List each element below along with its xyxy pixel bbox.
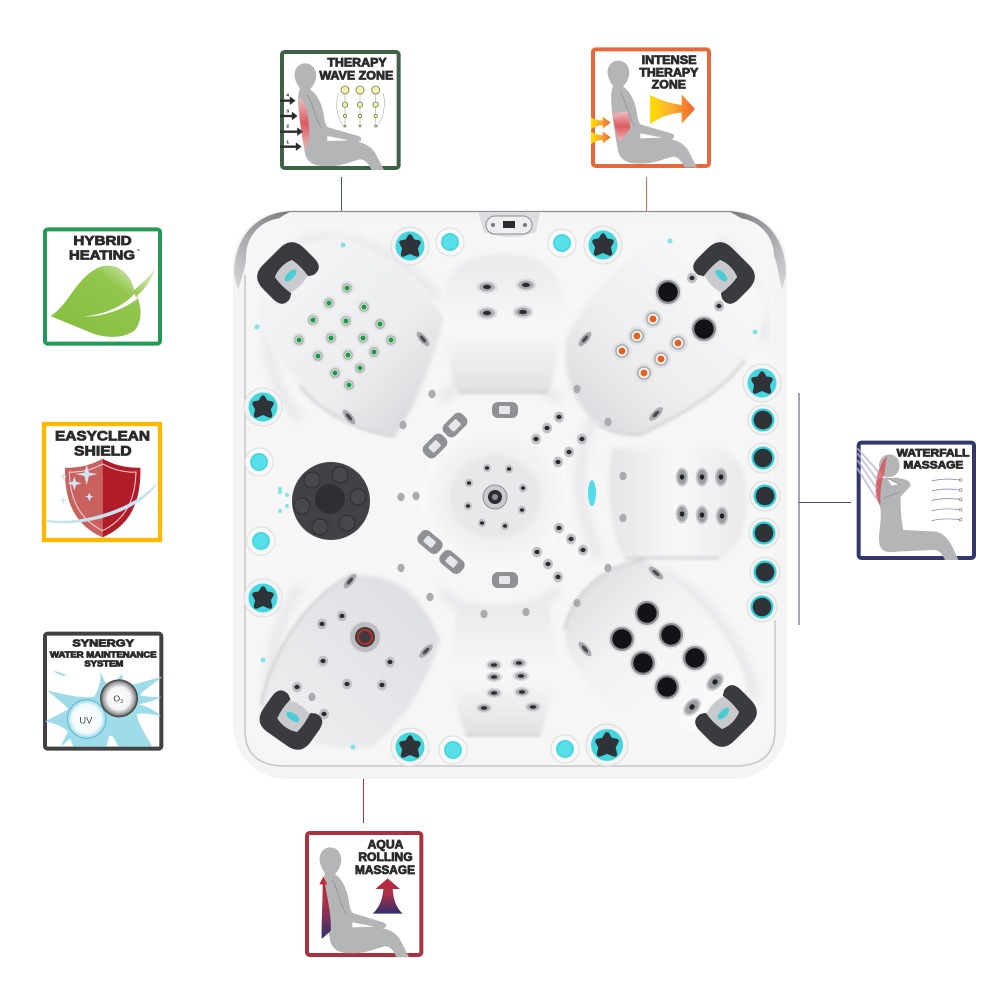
side seats (445, 254, 746, 735)
hot tub top view (233, 211, 787, 779)
shield icon (47, 459, 157, 537)
star control valves (244, 226, 781, 766)
panel: synergy water maintenance system (45, 634, 162, 749)
back gradient arrow (319, 877, 331, 939)
heading (319, 56, 393, 82)
filter disc (292, 462, 370, 540)
ridge shadows (262, 360, 745, 735)
heading: SYNERGY (72, 639, 134, 650)
heavy foot well jets (415, 402, 518, 588)
figure (875, 454, 958, 560)
arrow numbers: 4 (286, 93, 289, 98)
cyan accent lights (254, 238, 758, 750)
heading (639, 53, 698, 92)
central foot well (421, 423, 569, 571)
heading: WAVE ZONE (319, 68, 393, 82)
uv bubble: UV (79, 716, 93, 726)
heading: THERAPY (639, 65, 698, 79)
up arrow (373, 878, 403, 914)
small corner jets (292, 273, 727, 719)
arrow numbers (286, 93, 289, 144)
callout line: aqua rolling massage (362, 660, 364, 823)
panel: waterfall massage (857, 443, 974, 560)
heading: ZONE (652, 78, 686, 92)
callout line: intense therapy zone (646, 177, 648, 318)
heading (897, 447, 970, 472)
heading: MASSAGE (355, 864, 415, 877)
ripple lines (932, 479, 962, 521)
heading: ROLLING (358, 851, 413, 864)
central drain and ring jets (464, 464, 527, 530)
bottom seat jets (476, 658, 541, 713)
inner rim line (245, 275, 775, 766)
wedge jets (340, 330, 665, 660)
corner lounge basins (258, 236, 767, 748)
orange arrow (650, 94, 695, 124)
green therapy wave jets (292, 281, 398, 392)
panel: aqua rolling massage (307, 833, 421, 957)
panel: intense therapy zone (591, 49, 709, 167)
heading: THERAPY (327, 56, 387, 70)
heading: INTENSE (642, 53, 697, 67)
heading: ™ (137, 249, 140, 253)
splash icon (45, 670, 162, 747)
heading: WATER MAINTENANCE (50, 650, 157, 659)
heading (69, 233, 140, 263)
right seat jets (676, 468, 728, 526)
wave dots diagram (337, 86, 384, 127)
figure (608, 61, 697, 167)
arrow numbers: 3 (286, 108, 289, 113)
heading (355, 838, 415, 877)
numbered arrows (280, 97, 303, 151)
figure (320, 847, 409, 957)
control panel (478, 212, 540, 237)
top seat jets (476, 278, 536, 320)
ozone bubble (100, 679, 138, 717)
water streaks (857, 448, 878, 498)
cyan lamps (245, 228, 579, 764)
heading: WATERFALL (897, 447, 970, 459)
arrow numbers: 2 (286, 124, 289, 129)
ozone bubble: O (113, 694, 120, 704)
figure (295, 63, 384, 170)
foot well shading (450, 455, 540, 539)
callout bracket: waterfall massage (799, 393, 851, 625)
panel: easyclean shield (44, 424, 160, 540)
heading: SYSTEM (84, 660, 124, 669)
panel: therapy wave zone (280, 52, 399, 170)
heading: EASYCLEAN (55, 428, 150, 444)
heading: AQUA (368, 838, 404, 851)
deck interior (246, 218, 774, 765)
callout line: therapy wave zone (340, 177, 342, 280)
foot well side jets (531, 412, 588, 582)
ozone bubble: 3 (120, 699, 123, 705)
heading: HEATING (69, 248, 135, 263)
heading: HYBRID (73, 233, 132, 248)
side arrows (591, 117, 611, 144)
tub deck (233, 211, 787, 779)
right side diverter knobs (747, 405, 780, 622)
heading (55, 428, 150, 459)
headrest pillows (251, 236, 763, 756)
red aqua rolling jet (349, 621, 381, 653)
heading: MASSAGE (903, 460, 963, 472)
heading (50, 639, 157, 669)
grey corner crescents and top edge (234, 211, 786, 290)
large black jets (608, 278, 718, 701)
heading: SHIELD (74, 443, 132, 459)
leaf icon (51, 266, 156, 337)
orange intense therapy jets (612, 310, 688, 382)
arrow numbers: 1 (286, 139, 289, 144)
panel: hybrid heating (45, 229, 160, 344)
